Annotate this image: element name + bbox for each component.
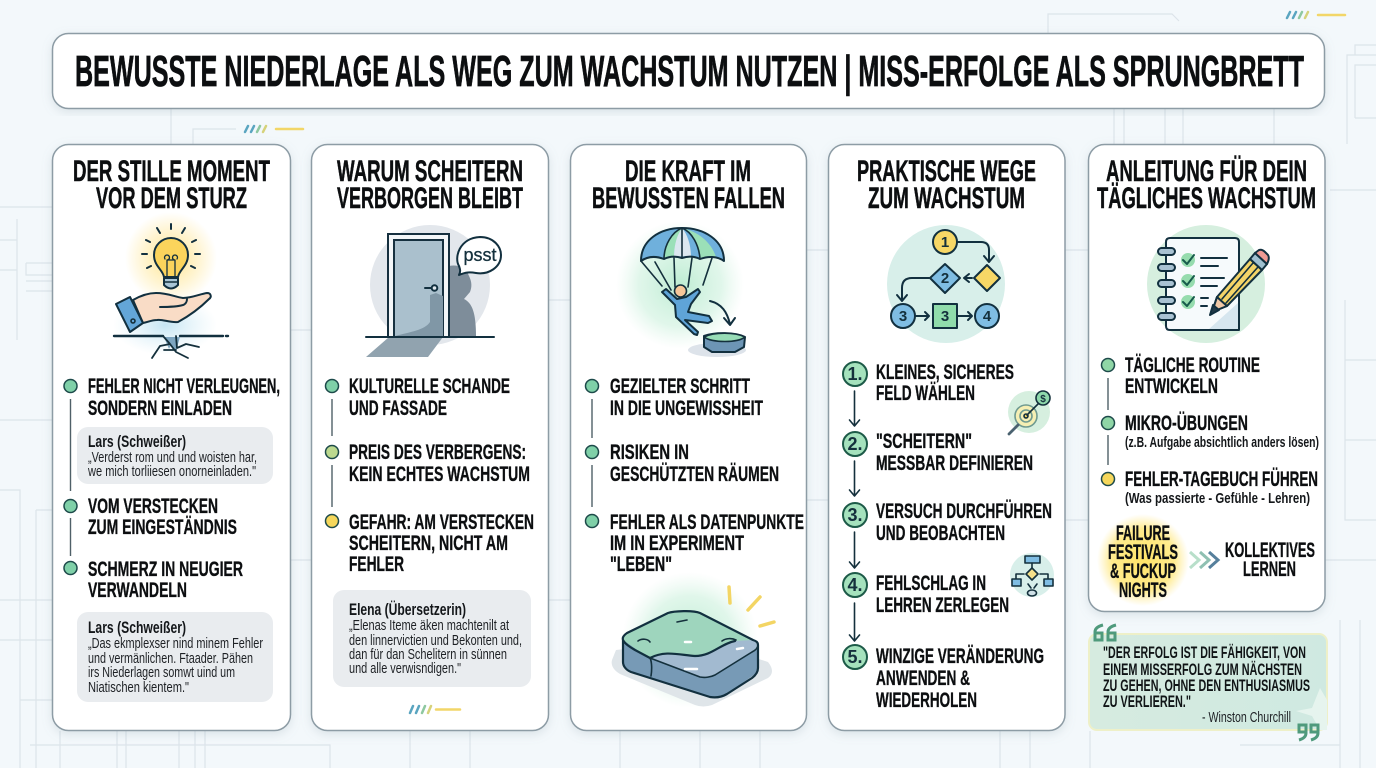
bullet: tägliche Routine: ENTWICKELN: [1125, 374, 1218, 398]
bullet: Gefahr: SCHEITERN, NICHT AM: [349, 531, 508, 555]
quote box: Elena: den linnervictien und Bekonten und,: [349, 633, 522, 649]
step 3: UND BEOBACHTEN: [876, 521, 1005, 545]
quote box: Elena: [333, 590, 531, 687]
step 1: FELD WÄHLEN: [876, 381, 975, 405]
bullet: Vom Verstecken: ZUM EINGESTÄNDNIS: [88, 515, 237, 539]
bullet: Gezielter Schritt: [586, 374, 763, 420]
bullet: Fehler als Datenpunkte: "LEBEN": [610, 552, 672, 576]
heading: panel 3: BEWUSSTEN FALLEN: [592, 182, 785, 215]
bullet: Preis des Verbergens: KEIN ECHTES WACHSTUM: [349, 462, 530, 486]
bullet: Fehler als Datenpunkte: [586, 510, 804, 576]
bullet: Kulturelle Schande: [326, 374, 510, 420]
callout: Failure Festivals: & FUCKUP: [1110, 559, 1176, 583]
icon: process flow diagram: 3: [941, 308, 949, 325]
bullet: Risiken: RISIKEN IN: [610, 440, 689, 464]
title bar: [52, 34, 1324, 108]
bullet: Mikro-Übungen: MIKRO-ÜBUNGEN: [1125, 410, 1248, 435]
decorative stripes top right: [1287, 12, 1345, 18]
bullet: Fehler nicht verleugnen: FEHLER NICHT VERLEUGNEN,: [88, 374, 280, 398]
arrow 3 to 4: [850, 532, 860, 568]
icon: process flow diagram: [887, 225, 1005, 343]
step 2: [843, 429, 1033, 475]
bullet: Preis des Verbergens: PREIS DES VERBERGENS:: [349, 440, 526, 464]
icon: door with whispering shadow: psst: [463, 245, 497, 265]
icon: process flow diagram: 1: [941, 234, 949, 251]
quote box: Lars 2: [77, 612, 273, 702]
heading: panel 5: [1097, 155, 1316, 215]
bullet: Risiken: [586, 440, 779, 486]
panel: Anleitung für dein tägliches Wachstum: [1088, 144, 1325, 612]
heading: panel 1: DER STILLE MOMENT: [73, 155, 270, 188]
quote text: [1103, 643, 1310, 711]
panel: der stille Moment: [52, 144, 290, 730]
heading: panel 2: WARUM SCHEITERN: [337, 155, 523, 188]
quote attribution: - Winston Churchill: [1202, 710, 1291, 726]
bullet: Gezielter Schritt: IN DIE UNGEWISSHEIT: [610, 396, 763, 420]
bullet: Preis des Verbergens: [326, 440, 530, 486]
arrow: chevrons: [1190, 552, 1218, 568]
quote box: Lars 1: Lars (Schweißer): [88, 432, 186, 451]
bullet: Fehler-Tagebuch: [1102, 466, 1318, 507]
quote box: Lars 1: [77, 427, 273, 484]
arrow 2 to 3: [850, 461, 860, 496]
step 5: 5.: [847, 647, 863, 667]
arrow 4 to 5: [850, 603, 860, 641]
quote box: Elena: und alle verwisndigen.": [349, 661, 461, 677]
panel: die Kraft im bewussten Fallen: [570, 144, 806, 730]
callout: Failure Festivals: [1097, 514, 1189, 606]
heading: panel 4: PRAKTISCHE WEGE: [857, 155, 1036, 188]
bullet: Fehler-Tagebuch: (Was passierte - Gefühle - Lehren): [1125, 490, 1310, 507]
step 4: FEHLSCHLAG IN: [876, 571, 986, 595]
step 2: 2.: [847, 434, 863, 454]
bullet: Kulturelle Schande: UND FASSADE: [349, 396, 447, 420]
icon: door with whispering shadow: [366, 225, 501, 357]
quote text: ZU VERLIEREN.": [1103, 692, 1191, 711]
quote box: Lars 1: „Verderst rom und und woisten har,: [88, 450, 257, 466]
bullet: Fehler als Datenpunkte: IM IN EXPERIMENT: [610, 531, 744, 555]
bullet: tägliche Routine: [1102, 353, 1260, 398]
step 1: KLEINES, SICHERES: [876, 360, 1014, 384]
icon: closing quotation marks: [1299, 725, 1318, 740]
icon: parachute jumper and platform: [616, 221, 746, 357]
icon: stone platform with spark lines: [612, 572, 774, 708]
bullet: Kulturelle Schande: KULTURELLE SCHANDE: [349, 374, 510, 398]
step 5: ANWENDEN &: [876, 666, 970, 690]
callout: Failure Festivals: FAILURE: [1116, 521, 1170, 545]
icon: target and coin: [1008, 391, 1050, 434]
step 1: 1.: [847, 364, 863, 384]
quote box: Lars 2: Niatischen kientem.": [88, 680, 189, 696]
bullet: Schmerz in Neugier: SCHMERZ IN NEUGIER: [88, 557, 243, 581]
icon: process flow diagram: 2: [941, 270, 949, 287]
arrow 1 to 2: [850, 391, 860, 426]
bullet: Risiken: GESCHÜTZTEN RÄUMEN: [610, 461, 779, 486]
quote box: Lars 2: Lars (Schweißer): [88, 618, 186, 637]
callout: Failure Festivals: FESTIVALS: [1108, 540, 1178, 564]
step 3: [843, 498, 1052, 545]
bullet: Fehler nicht verleugnen: SONDERN EINLADEN: [88, 396, 232, 420]
panel: warum Scheitern verborgen bleibt: [312, 144, 548, 730]
step 4: LEHREN ZERLEGEN: [876, 593, 1009, 617]
bullet: Gefahr: FEHLER: [349, 552, 404, 576]
step 5: WIEDERHOLEN: [876, 688, 977, 712]
icon: target and coin: $: [1040, 394, 1046, 405]
step 5: [843, 644, 1044, 712]
quote box: Lars 1: we mich torliiesen onorneinladen.": [87, 464, 256, 480]
quote: Winston Churchill: [1089, 625, 1327, 740]
heading: panel 2: VERBORGEN BLEIBT: [337, 182, 523, 215]
quote box: Elena: dan für dan Schelitern in sünnen: [349, 647, 507, 663]
quote box: Elena: „Elenas Iteme äken machtenilt at: [349, 618, 509, 634]
bullet: Gefahr: GEFAHR: AM VERSTECKEN: [349, 510, 534, 534]
icon: process flow diagram: 4: [983, 308, 992, 325]
callout: kollektives Lernen: KOLLEKTIVES: [1225, 538, 1315, 562]
heading: panel 4: [857, 155, 1036, 215]
bullet: Gefahr: [326, 510, 534, 576]
bullet: Schmerz in Neugier: [64, 557, 243, 602]
step 1: [843, 360, 1014, 405]
callout: Failure Festivals: NIGHTS: [1119, 578, 1167, 602]
icon: opening quotation marks: [1095, 625, 1116, 640]
heading: panel 3: DIE KRAFT IM: [625, 155, 751, 188]
icon: process flow diagram: 3: [899, 308, 907, 325]
icon: light bulb over open hand and cracked ground: [113, 212, 228, 358]
step 3: VERSUCH DURCHFÜHREN: [876, 498, 1052, 523]
bullet: tägliche Routine: TÄGLICHE ROUTINE: [1125, 353, 1260, 377]
bullet: Vom Verstecken: VOM VERSTECKEN: [88, 494, 218, 518]
decorative stripes bottom: [410, 706, 460, 713]
panel: praktische Wege zum Wachstum: [828, 144, 1065, 730]
callout: kollektives Lernen: [1225, 538, 1315, 581]
quote box: Lars 2: „Das ekmplexser nind minem Fehler: [88, 636, 263, 652]
heading: panel 3: [592, 155, 785, 215]
icon: mini flow chart: [1010, 553, 1054, 597]
bullet: Fehler nicht verleugnen: [64, 374, 280, 420]
quote box: Elena: Elena (Übersetzerin): [349, 600, 466, 619]
heading: panel 1: VOR DEM STURZ: [96, 182, 247, 215]
step 4: [843, 571, 1009, 617]
step 2: "SCHEITERN": [876, 429, 972, 453]
step 5: WINZIGE VERÄNDERUNG: [876, 644, 1044, 668]
quote box: Lars 2: und vermänlichen. Ftaader. Pähen: [88, 651, 253, 667]
decorative stripes top left: [245, 126, 303, 132]
bullet: Gezielter Schritt: GEZIELTER SCHRITT: [610, 374, 750, 398]
bullet: Schmerz in Neugier: VERWANDELN: [88, 578, 187, 602]
step 2: MESSBAR DEFINIEREN: [876, 451, 1033, 475]
heading: panel 2: [337, 155, 523, 215]
quote box: Lars 2: irs Niederlagen somwt uind um: [88, 665, 235, 681]
bullet: Mikro-Übungen: [1102, 410, 1319, 451]
bullet: Fehler als Datenpunkte: FEHLER ALS DATENPUNKTE: [610, 510, 804, 534]
step 4: 4.: [847, 575, 863, 595]
heading: panel 1: [73, 155, 270, 215]
icon: notebook checklist with pencil: [1147, 225, 1269, 343]
callout: kollektives Lernen: LERNEN: [1243, 557, 1296, 581]
step 3: 3.: [847, 505, 863, 525]
heading: panel 4: ZUM WACHSTUM: [868, 182, 1025, 215]
bullet: Vom Verstecken: [64, 494, 237, 539]
